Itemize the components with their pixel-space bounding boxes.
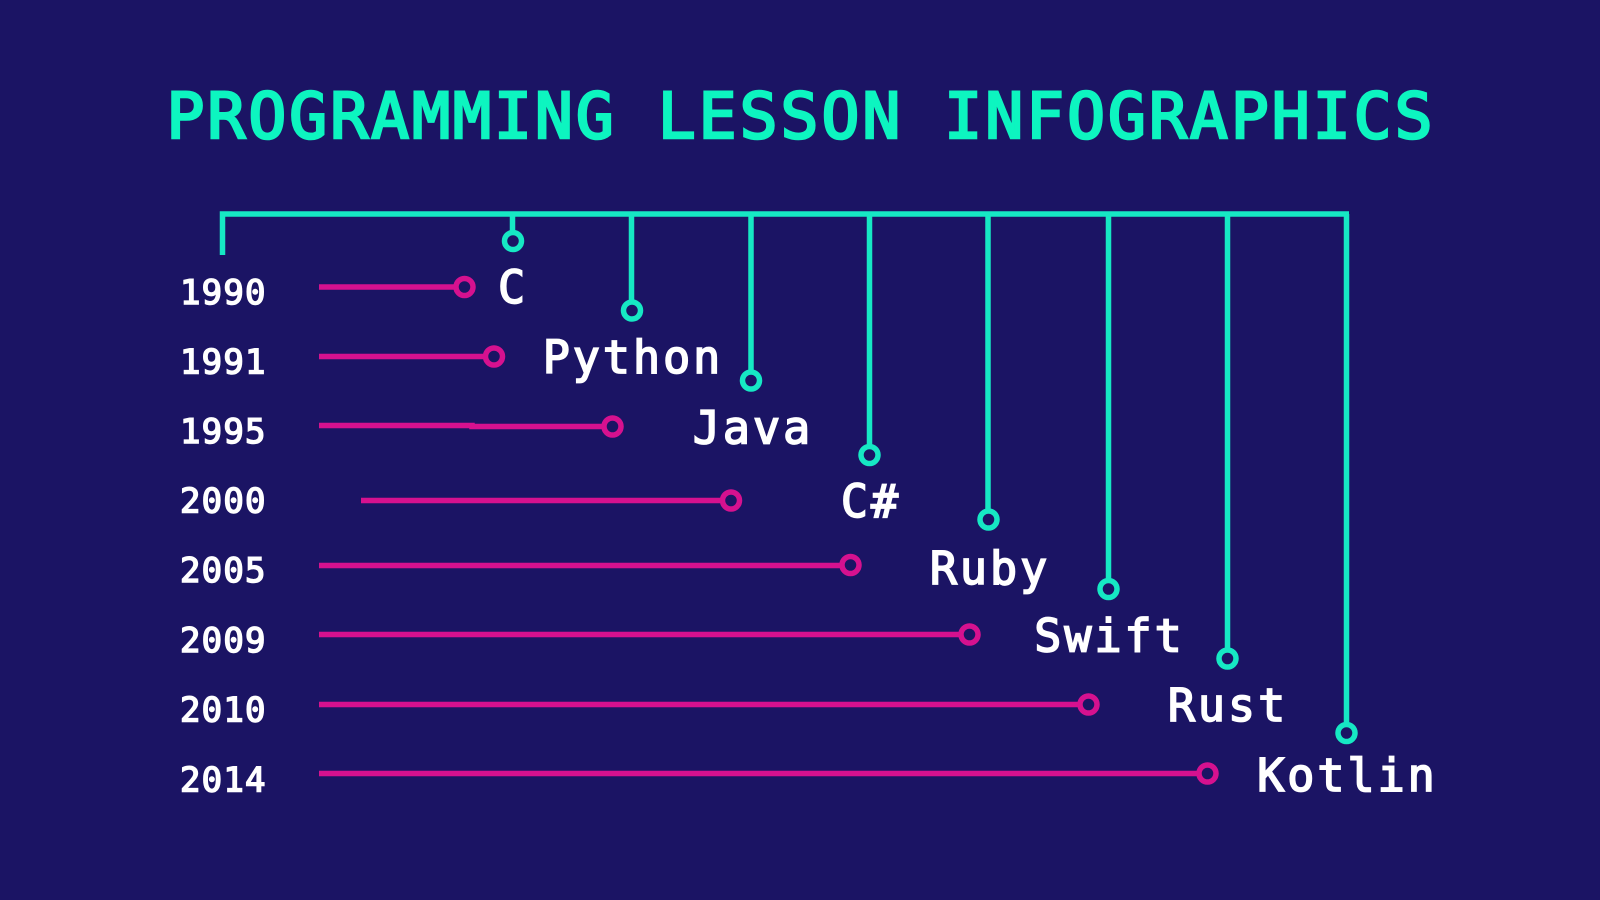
language: C <box>498 261 528 314</box>
row: 1991 Python <box>180 331 723 384</box>
language: Java <box>693 402 813 454</box>
language: C# <box>841 475 901 528</box>
timeline bar <box>319 348 502 365</box>
connector: Rust <box>1219 214 1236 667</box>
language: Rust <box>1168 679 1288 732</box>
timeline bar <box>319 556 859 574</box>
timeline bar <box>361 492 740 509</box>
teal language bracket <box>222 214 1355 742</box>
connector: Swift <box>1100 214 1117 598</box>
connector: C <box>504 214 522 250</box>
connector: Kotlin <box>1338 214 1355 742</box>
year: 1991 <box>180 342 267 382</box>
language: Swift <box>1034 610 1185 662</box>
top rail <box>222 214 1349 255</box>
row: 2014 Kotlin <box>180 749 1438 802</box>
row: 2010 Rust <box>180 679 1288 732</box>
year: 2014 <box>180 760 267 800</box>
year: 2005 <box>180 551 267 591</box>
timeline bar <box>319 696 1097 713</box>
language: Kotlin <box>1257 749 1438 802</box>
year: 1995 <box>180 412 267 452</box>
timeline bar <box>319 418 621 435</box>
row: 2005 Ruby <box>180 542 1050 595</box>
row: 1990 C <box>180 261 528 314</box>
connector: Java <box>742 214 760 389</box>
title: PROGRAMMING LESSON INFOGRAPHICS <box>166 80 1432 153</box>
year: 2010 <box>180 690 267 730</box>
language: Python <box>543 331 723 384</box>
language: Ruby <box>930 542 1050 595</box>
year: 2000 <box>180 482 267 522</box>
timeline bar <box>319 278 473 296</box>
connector: C# <box>861 214 878 464</box>
row: 2000 C# <box>180 475 901 528</box>
connector: Ruby <box>980 214 997 528</box>
row: 2009 Swift <box>180 610 1185 662</box>
year: 1990 <box>180 273 267 313</box>
timeline bar <box>319 626 978 643</box>
connector: Python <box>624 214 640 319</box>
row: 1995 Java <box>180 402 813 454</box>
timeline bar <box>319 765 1216 782</box>
year: 2009 <box>180 621 267 661</box>
